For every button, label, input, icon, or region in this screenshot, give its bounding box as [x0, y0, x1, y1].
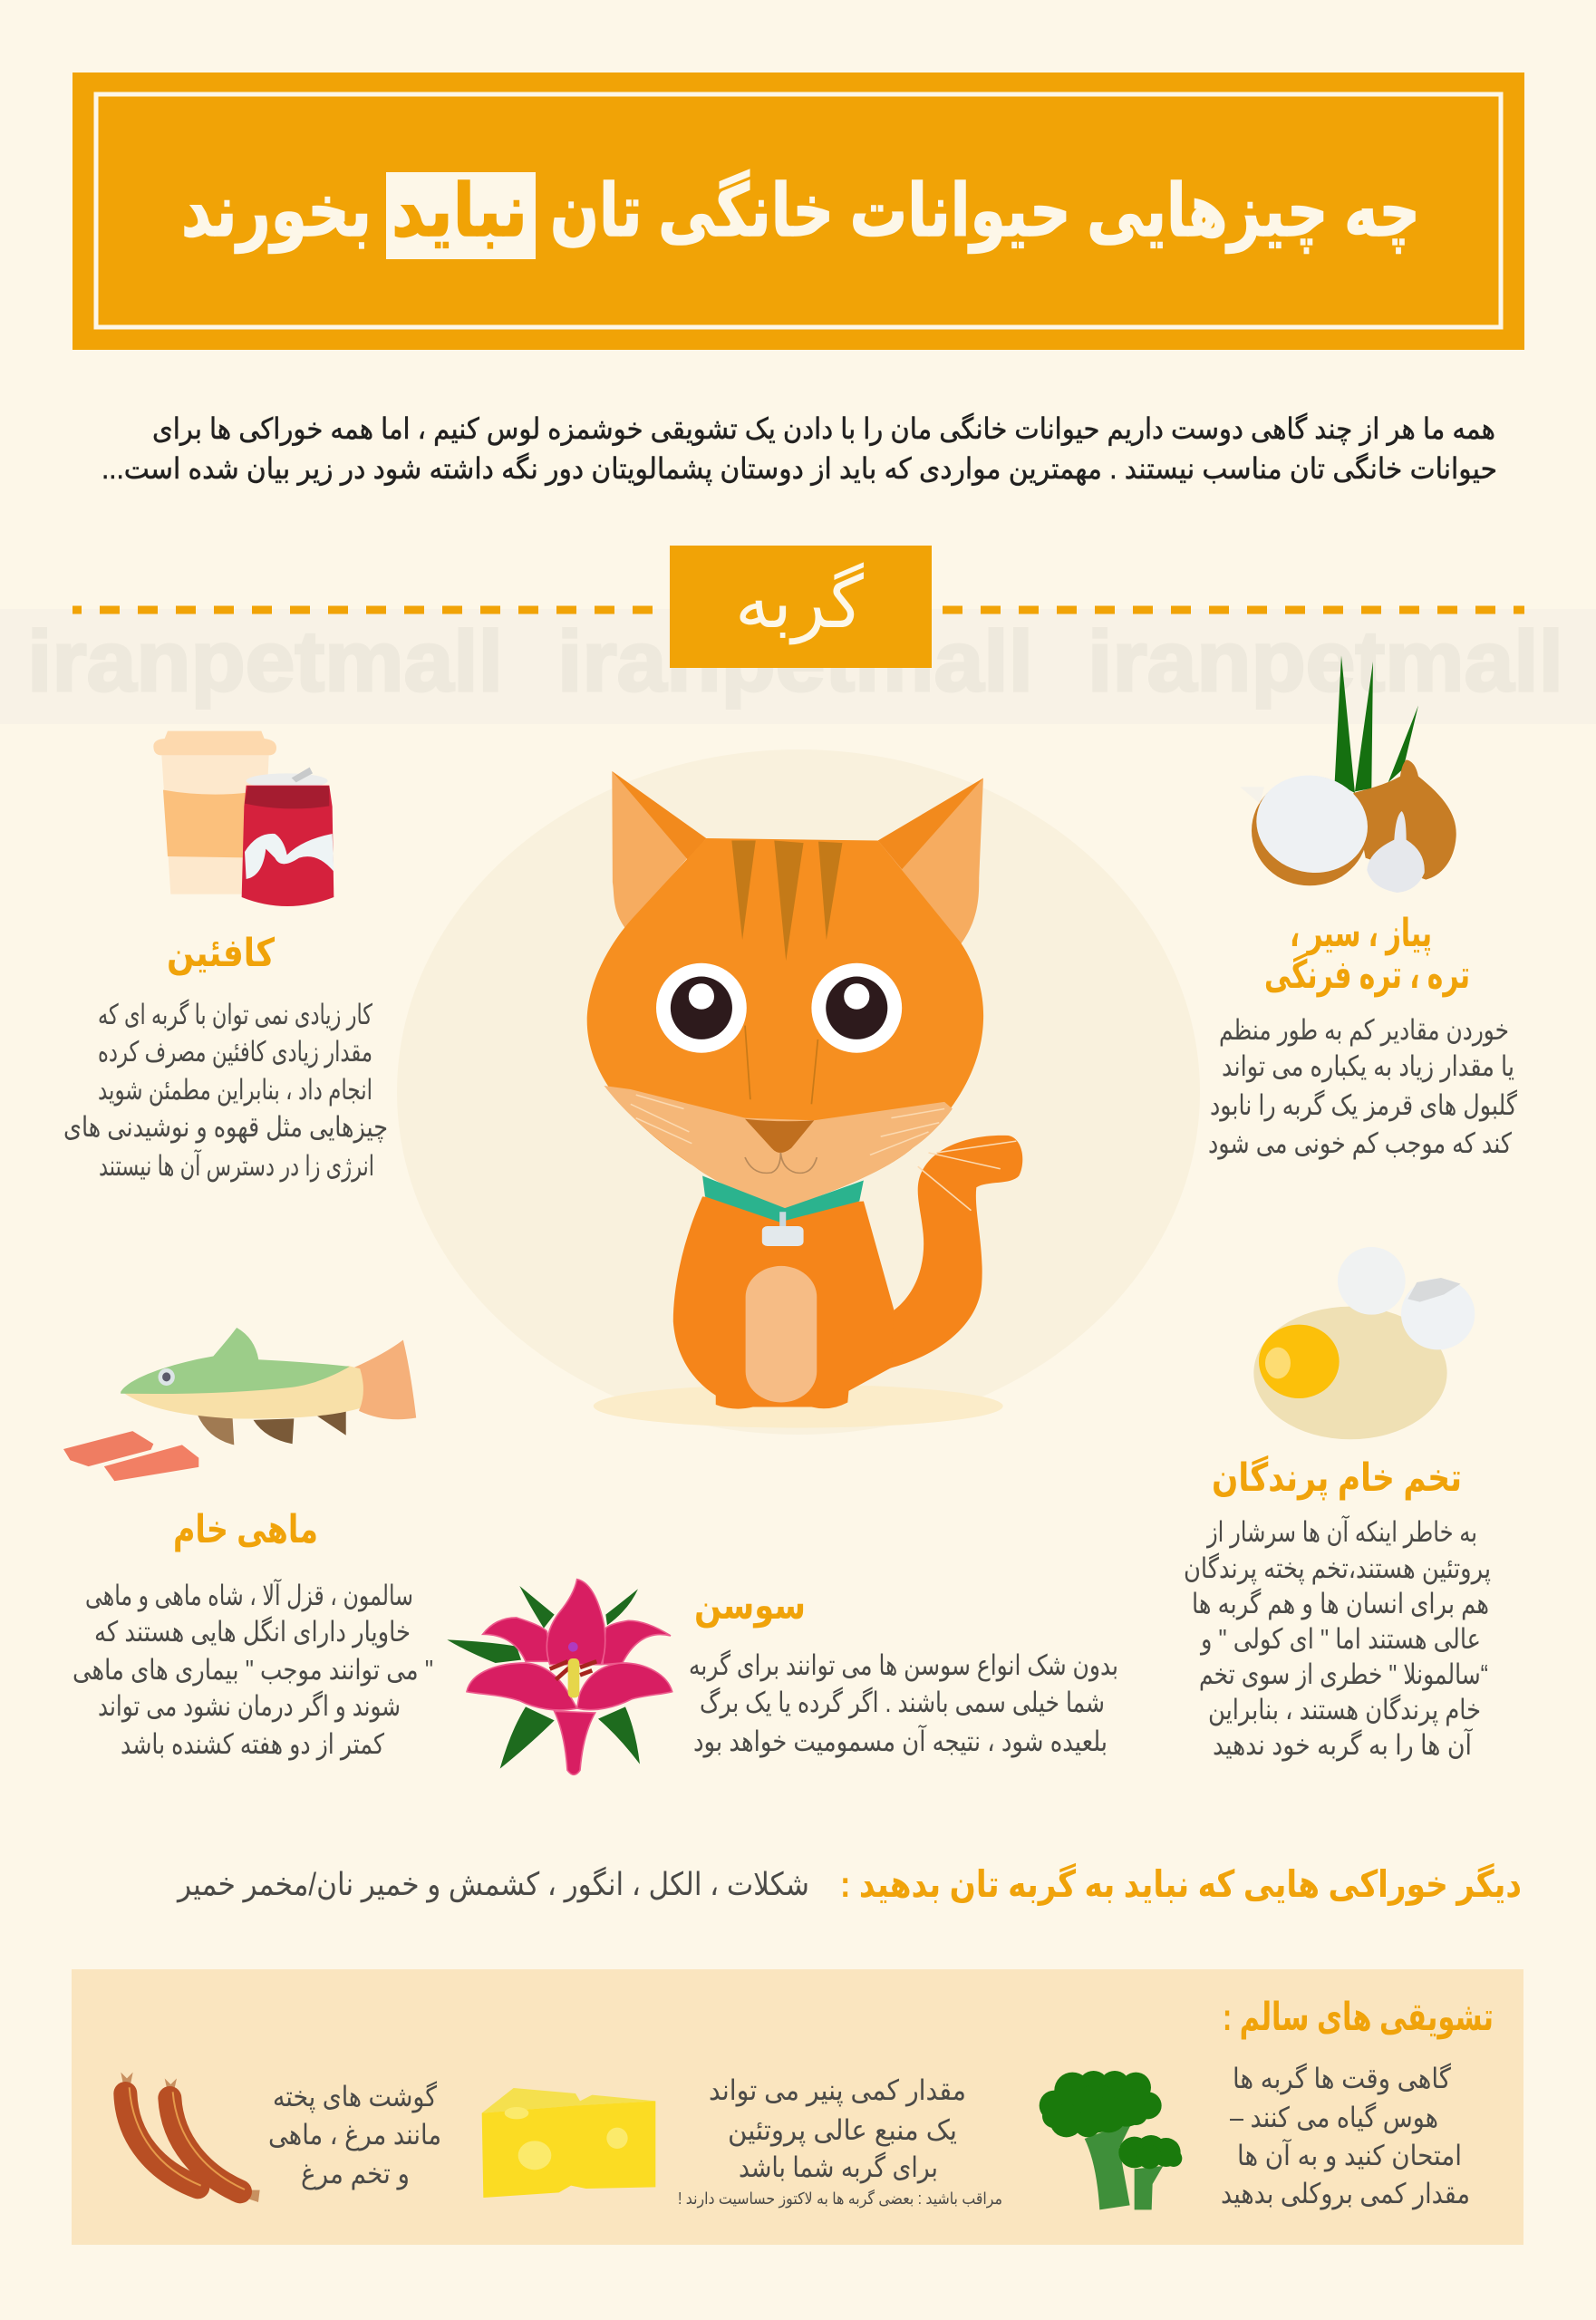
text block: انجام داد ، بنابراین مطمئن شوید: [98, 1074, 372, 1107]
heading: پیاز ، سیر ،: [1290, 912, 1432, 956]
title: بخورند: [181, 170, 372, 254]
heading: ماهی خام: [173, 1508, 318, 1552]
text block: [1208, 1014, 1517, 1160]
heading: کافئین: [167, 932, 275, 976]
text block: گلبول های قرمز یک گربه را نابود: [1210, 1089, 1517, 1122]
panel: lily: [447, 1580, 1118, 1774]
text: cheese: مراقب باشید : بعضی گربه ها به لاکتوز حساسیت دارند !: [678, 2189, 1002, 2209]
text block: به خاطر اینکه آن ها سرشار از: [1205, 1514, 1477, 1549]
title: [181, 169, 1420, 254]
text block: بلعیده شود ، نتیجه آن مسمومیت خواهد بود: [693, 1724, 1108, 1758]
text: cheese: یک منبع عالی پروتئین: [728, 2114, 957, 2147]
text block: خوردن مقادیر کم به طور منظم: [1219, 1014, 1509, 1047]
heading: تخم خام پرندگان: [1212, 1455, 1462, 1501]
heading: سوسن: [694, 1584, 806, 1629]
text block: کمتر از دو هفته کشنده باشد: [121, 1728, 384, 1761]
text: cheese: [678, 2074, 1002, 2209]
icon: raw egg and shell: [1253, 1247, 1475, 1439]
text block: انرژی زا در دسترس آن ها نیستند: [99, 1148, 374, 1183]
text block: “سالمونلا " خطری از سوی تخم: [1199, 1658, 1488, 1691]
header banner: [73, 72, 1524, 350]
section badge: cat: [670, 546, 932, 668]
text block: یا مقدار زیاد به یکباره می تواند: [1222, 1050, 1514, 1083]
other foods line: [176, 1862, 1522, 1906]
text block: خام پرندگان هستند ، بنابراین: [1208, 1694, 1481, 1726]
watermark band: iranpetmall: [1088, 614, 1563, 710]
text: broccoli: امتحان کنید و به آن ها: [1237, 2138, 1462, 2172]
text block: پروتئین هستند،تخم پخته پرندگان: [1184, 1552, 1491, 1585]
intro paragraph: همه ما هر از چند گاهی دوست داریم حیوانات خانگی مان را با دادن یک تشویقی خوشمزه لوس کنیم ، اما همه خوراکی ها برای: [152, 412, 1495, 446]
text block: شما خیلی سمی باشند . اگر گرده یا یک برگ: [700, 1686, 1105, 1719]
title: نباید: [392, 170, 527, 251]
panel: raw fish: [63, 1328, 433, 1761]
watermark band: iranpetmall: [557, 614, 1033, 710]
text block: آن ها را به گربه خود ندهید: [1213, 1727, 1473, 1762]
text block: سالمون ، قزل آلا ، شاه ماهی و ماهی: [85, 1578, 413, 1612]
heading: تشویقی های سالم :: [1223, 1996, 1494, 2040]
text block: " می توانند موجب " بیماری های ماهی: [73, 1654, 433, 1687]
text block: چیزهایی مثل قهوه و نوشیدنی های: [63, 1111, 388, 1144]
icon: cheese: [482, 2088, 655, 2198]
text block: خاویار دارای انگل هایی هستند که: [94, 1616, 411, 1648]
panel: caffeine: [63, 731, 388, 1183]
section badge: cat: گربه: [735, 562, 865, 645]
text: cooked meat: گوشت های پخته: [273, 2081, 437, 2113]
icon: broccoli: [1040, 2071, 1182, 2209]
panel: healthy treats: [72, 1969, 1523, 2245]
icon: lily flower: [447, 1580, 672, 1774]
intro paragraph: [102, 412, 1497, 486]
intro paragraph: حیوانات خانگی تان مناسب نیستند . مهمترین مواردی که باید از دوستان پشمالویتان دور نگه داشته شود در زیر بیان شده است...: [102, 452, 1497, 486]
text: broccoli: گاهی وقت ها گربه ها: [1233, 2063, 1451, 2095]
text: broccoli: مقدار کمی بروکلی بدهید: [1221, 2178, 1470, 2210]
text block: کند که موجب کم خونی می شود: [1208, 1127, 1512, 1160]
panel: onion and garlic: [1208, 655, 1517, 1160]
text block: [73, 1578, 433, 1761]
text: broccoli: هوس گیاه می کنند –: [1230, 2102, 1438, 2134]
text block: [63, 999, 388, 1183]
text block: هم برای انسان ها و هم گربه ها: [1192, 1588, 1489, 1620]
icon: coffee cup and soda can: [153, 731, 334, 906]
text block: بدون شک انواع سوسن ها می توانند برای گربه: [689, 1649, 1118, 1682]
text: cooked meat: و تخم مرغ: [301, 2158, 410, 2190]
icon: cat: [587, 771, 1022, 1428]
text block: کار زیادی نمی توان با گربه ای که: [98, 999, 372, 1031]
text block: مقدار زیادی کافئین مصرف کرده: [98, 1036, 372, 1068]
watermark band: iranpetmall: [27, 614, 503, 710]
heading: تره ، تره فرنگی: [1264, 952, 1470, 998]
text: broccoli: [1221, 2063, 1470, 2210]
panel: raw eggs: [1184, 1247, 1491, 1762]
text: cheese: برای گربه شما باشد: [739, 2151, 938, 2184]
icon: onion and garlic: [1240, 655, 1456, 893]
heading: [1264, 912, 1470, 998]
watermark band: [0, 609, 1596, 724]
text: cooked meat: مانند مرغ ، ماهی: [268, 2119, 441, 2151]
text: cheese: مقدار کمی پنیر می تواند: [709, 2074, 966, 2107]
icon: sausages: [121, 2073, 260, 2202]
text block: [1184, 1514, 1491, 1762]
icon: fish and salmon fillets: [63, 1328, 416, 1481]
text block: شوند و اگر درمان نشود می تواند: [98, 1690, 401, 1723]
background circle: [397, 749, 1200, 1435]
text block: [689, 1649, 1118, 1758]
text: cooked meat: [268, 2081, 441, 2190]
text block: عالی هستند اما " ای کولی " و: [1199, 1623, 1481, 1656]
other foods line: شکلات ، الکل ، انگور ، کشمش و خمیر نان/مخمر خمیر: [176, 1866, 809, 1903]
